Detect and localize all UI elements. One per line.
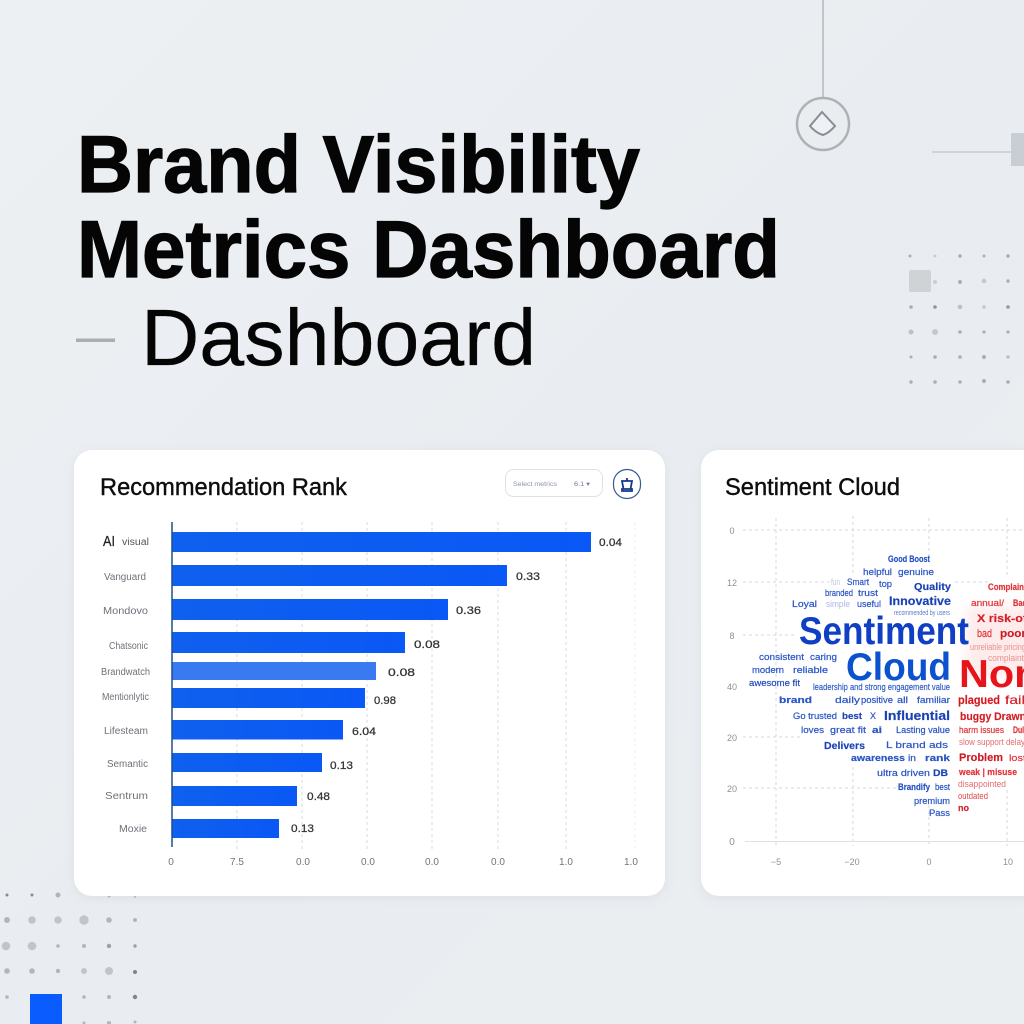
word cloud: positive terms: Good Boost: [888, 554, 930, 564]
word cloud: negative terms: X risk-of: [977, 613, 1024, 625]
x axis labels: 10: [1003, 857, 1013, 867]
heading: recommendation rank: Recommendation Rank: [100, 474, 348, 501]
word cloud: positive terms: Delivers: [824, 741, 865, 752]
category labels: Chatsonic: [109, 641, 148, 652]
word cloud: positive terms: DB: [933, 768, 949, 778]
word cloud: negative terms: fail: [1005, 693, 1024, 707]
word cloud: positive terms: branded: [825, 588, 853, 598]
y axis labels: [727, 526, 737, 848]
word cloud: positive terms: Influential: [884, 708, 950, 723]
word cloud: positive terms: great fit: [830, 725, 867, 735]
x axis labels: 0.0: [425, 857, 439, 868]
x axis labels: [771, 857, 1013, 867]
value labels: 0.48: [307, 791, 330, 803]
word cloud: positive terms: L brand ads: [886, 740, 949, 750]
value labels: 0.08: [388, 667, 415, 679]
filter pill: Select metrics: [513, 481, 558, 488]
word cloud: positive terms: positive: [861, 695, 893, 705]
title: Metrics Dashboard: [77, 205, 780, 295]
panel: recommendation rank: [74, 450, 665, 896]
word cloud: headline terms: [799, 610, 1024, 696]
x axis labels: [168, 857, 638, 868]
word cloud: positive terms: modern: [752, 665, 784, 675]
word cloud: positive terms: Smart: [847, 577, 869, 587]
x axis labels: 0.0: [296, 857, 310, 868]
word cloud: positive terms: daily: [835, 695, 861, 705]
y axis labels: 40: [727, 682, 737, 692]
word cloud: positive terms: best: [935, 782, 950, 792]
value labels: 6.04: [352, 726, 376, 738]
word cloud: positive terms: Brandify: [898, 782, 930, 792]
category labels: visual: [122, 537, 149, 548]
word cloud: positive terms: rank: [925, 753, 951, 763]
x axis labels: 7.5: [230, 857, 244, 868]
x axis labels: 0.0: [491, 857, 505, 868]
word cloud: positive terms: X: [870, 711, 876, 721]
word cloud: positive terms: best: [842, 711, 862, 721]
value labels: [291, 537, 622, 835]
y axis labels: 0: [729, 837, 735, 848]
x axis labels: 1.0: [624, 857, 638, 868]
dot grid bottom left: [2, 892, 137, 1024]
word cloud: positive terms: brand: [779, 695, 812, 705]
word cloud: negative terms: poor: [1000, 628, 1024, 640]
x axis labels: −5: [771, 857, 781, 867]
word cloud: positive terms: useful: [857, 599, 881, 609]
y axis labels: 20: [727, 784, 737, 794]
value labels: 0.33: [516, 571, 540, 583]
word cloud: negative terms: annual/: [971, 598, 1005, 608]
word cloud: positive terms: in: [908, 753, 916, 763]
y axis labels: 0: [729, 526, 735, 536]
word cloud: positive terms: awareness: [851, 753, 905, 763]
value labels: 0.08: [414, 639, 440, 651]
word cloud: positive terms: caring: [810, 652, 837, 662]
category labels: Vanguard: [104, 572, 146, 583]
chart grid: [743, 516, 1024, 846]
word cloud: positive terms: ultra driven: [877, 768, 930, 778]
word cloud: positive terms: top: [879, 579, 892, 589]
x axis labels: 0.0: [361, 857, 375, 868]
word cloud: negative terms: bad: [977, 628, 992, 640]
category labels: [101, 533, 150, 835]
value labels: 0.13: [291, 823, 314, 835]
word cloud: positive terms: ai: [872, 725, 882, 735]
heading: sentiment cloud: Sentiment Cloud: [725, 474, 900, 501]
word cloud: negative terms: harm issues: [959, 725, 1004, 735]
word cloud: positive terms: genuine: [898, 567, 934, 577]
word cloud: positive terms: Lasting value: [896, 725, 950, 735]
panel: sentiment cloud: [701, 450, 1024, 896]
connector block: [932, 133, 1024, 166]
word cloud: positive terms: Loyal: [792, 599, 817, 609]
word cloud: positive terms: Go trusted: [793, 711, 837, 721]
x axis labels: 0: [168, 857, 174, 868]
category labels: AI: [103, 533, 115, 550]
title: Brand Visibility: [77, 120, 640, 210]
word cloud: negative terms: [958, 582, 1024, 813]
value labels: 0.36: [456, 605, 481, 617]
word cloud backdrop: [966, 606, 1024, 676]
word cloud: positive terms: helpful: [863, 567, 892, 577]
x axis labels: 1.0: [559, 857, 573, 868]
word cloud: negative terms: disappointed: [958, 779, 1006, 789]
word cloud: positive terms: recommended by users: [894, 610, 950, 617]
bar chart: [172, 522, 591, 847]
title: Dashboard: [141, 293, 536, 382]
word cloud: negative terms: Problem: [959, 752, 1003, 764]
word cloud: negative terms: weak | misuse: [958, 767, 1017, 777]
word cloud: positive terms: consistent: [759, 652, 805, 662]
word cloud: positive terms: Innovative: [889, 594, 951, 608]
x axis labels: −20: [844, 857, 860, 867]
word cloud: positive terms: trust: [858, 588, 879, 598]
word cloud: positive terms: familiar: [917, 695, 950, 705]
y axis labels: 20: [727, 733, 737, 743]
word cloud: positive terms: loves: [801, 725, 825, 735]
category labels: Sentrum: [105, 791, 148, 802]
category labels: Moxie: [119, 824, 147, 835]
word cloud: positive terms: Quality: [914, 582, 951, 593]
word cloud: positive terms: fun: [831, 577, 840, 587]
word cloud: negative terms: no: [958, 803, 969, 813]
word cloud: negative terms: outdated: [958, 791, 988, 801]
word cloud: positive terms: reliable: [793, 665, 828, 675]
chart gridlines: [237, 522, 635, 850]
category labels: Lifesteam: [104, 726, 148, 737]
category labels: Mentionlytic: [102, 692, 149, 703]
word cloud: headline terms: Cloud: [846, 646, 951, 689]
word cloud: positive terms: [749, 554, 951, 818]
value labels: 0.04: [599, 537, 622, 549]
category labels: Semantic: [107, 759, 148, 770]
word cloud: negative terms: plagued: [958, 693, 1000, 707]
filter pill: 6.1 ▾: [574, 481, 591, 488]
x axis labels: 0: [926, 857, 932, 867]
y axis labels: 12: [727, 578, 737, 588]
category labels: Brandwatch: [101, 667, 150, 678]
value labels: 0.98: [374, 695, 396, 707]
filter pill: [506, 470, 602, 496]
word cloud: positive terms: premium: [914, 796, 950, 806]
icon: settings button: [614, 470, 640, 498]
word cloud: positive terms: Pass: [929, 808, 951, 818]
value labels: 0.13: [330, 760, 353, 772]
word cloud: negative terms: lost: [1009, 753, 1024, 763]
icon: pendant circle: [797, 0, 849, 150]
y axis labels: 8: [729, 631, 735, 641]
title: [77, 120, 780, 382]
word cloud: positive terms: awesome fit: [749, 678, 801, 688]
dot grid top right: [908, 254, 1010, 384]
word cloud: positive terms: all: [897, 695, 908, 705]
accent square: [30, 994, 62, 1024]
word cloud: headline terms: Sentiment: [799, 610, 969, 653]
word cloud: positive terms: leadership and strong engagement value: [813, 682, 950, 692]
word cloud: positive terms: simple: [826, 599, 850, 609]
category labels: Mondovo: [103, 606, 148, 617]
